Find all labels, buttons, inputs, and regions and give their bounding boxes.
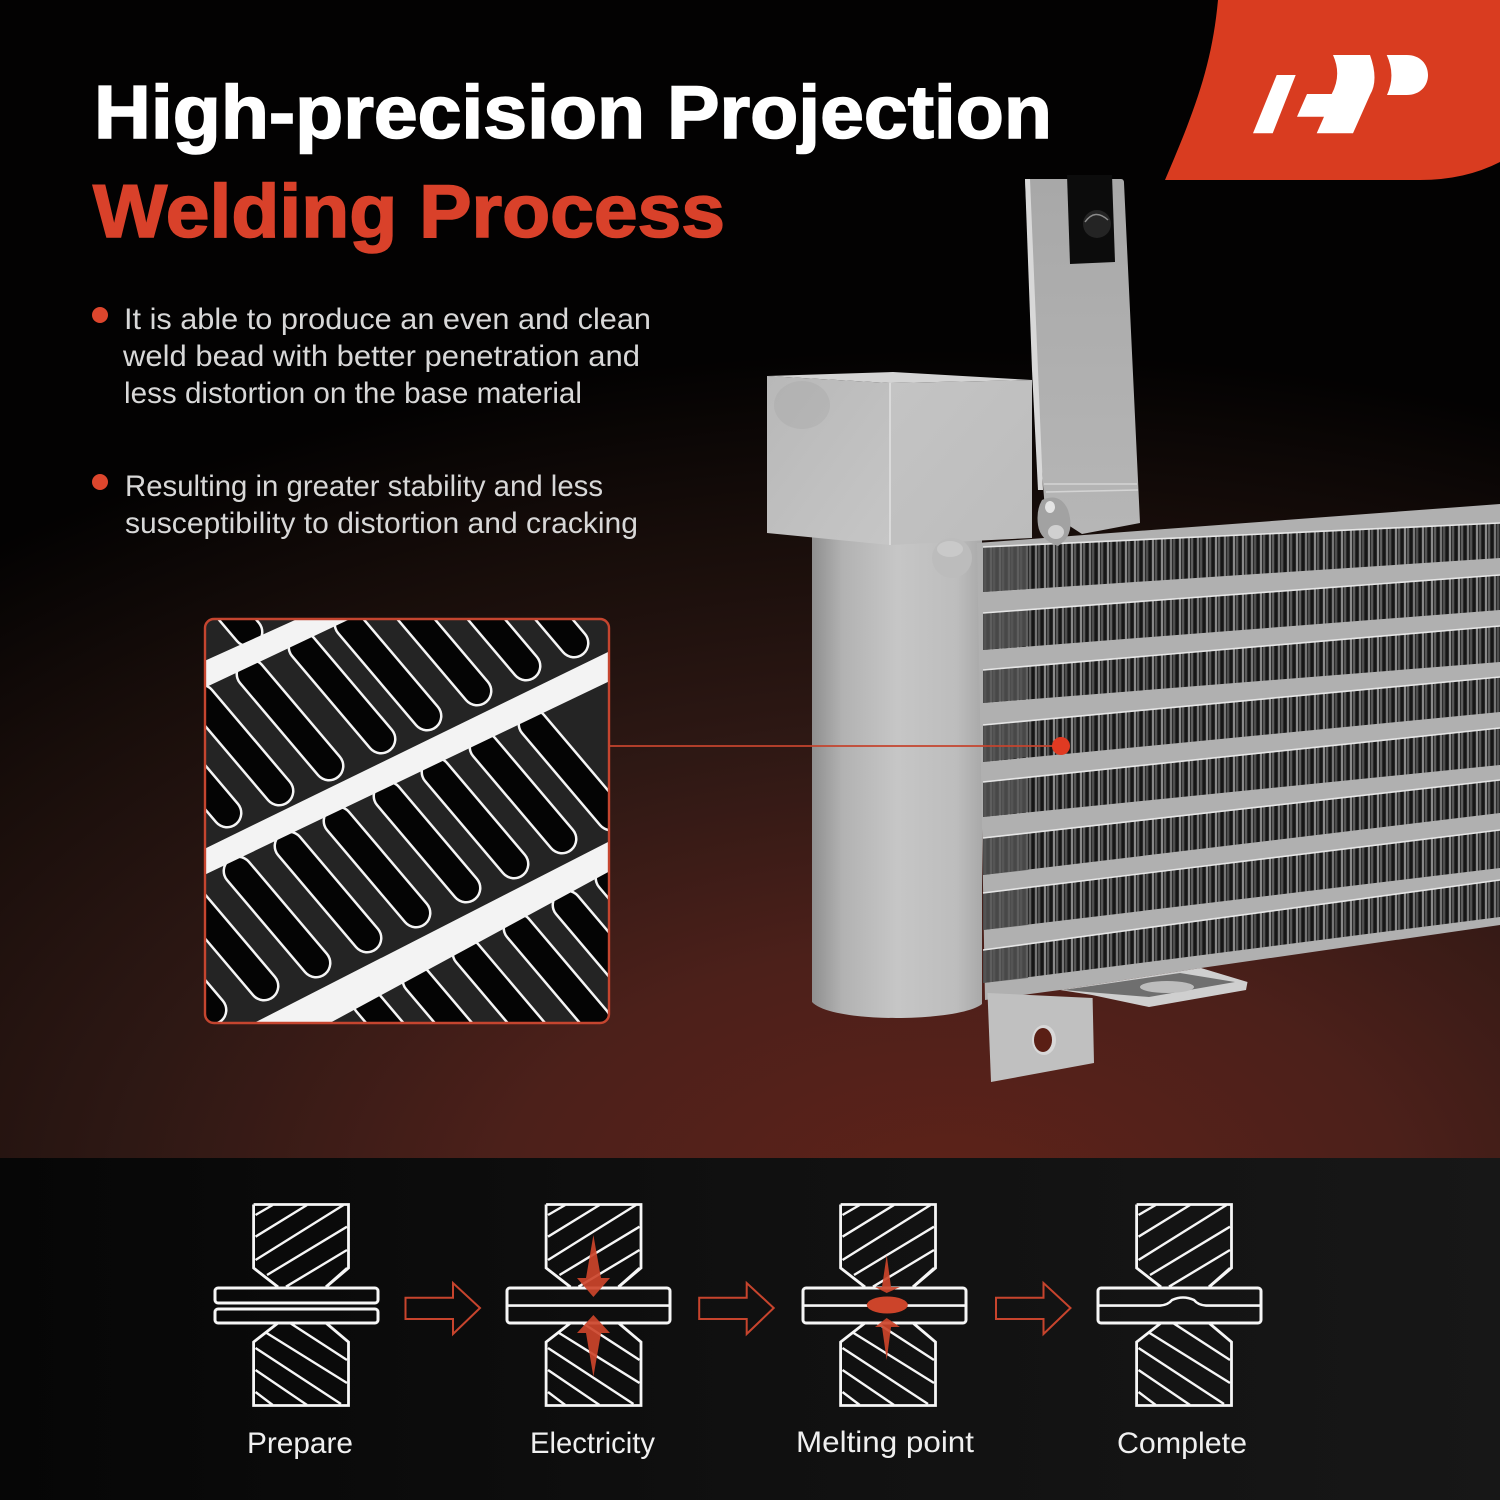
step 3: melting point: Melting point [796, 1426, 975, 1459]
background [0, 0, 1500, 1158]
condenser product [767, 175, 1500, 1082]
arrow 2 [699, 1283, 774, 1334]
title: Welding Process [93, 169, 725, 253]
square tank cap [767, 372, 1032, 545]
fin loops [206, 620, 608, 1022]
step 1: prepare [215, 1204, 378, 1460]
arrow 3 [996, 1283, 1070, 1334]
cylinder tank [812, 535, 982, 1018]
upper mounting bracket [1025, 175, 1140, 534]
step 3: melting point [796, 1204, 975, 1459]
title: High-precision Projection [94, 70, 1052, 154]
bullet: stability: Resulting in greater stability and less [125, 470, 603, 503]
bullet: weld bead [92, 303, 651, 410]
bullet: stability [92, 470, 638, 540]
title [93, 70, 1052, 253]
callout line [610, 737, 1070, 755]
step 2: electricity: Electricity [530, 1427, 655, 1460]
lower flange [1060, 968, 1248, 1007]
lower mounting bracket [988, 993, 1094, 1082]
white tube bars [200, 620, 612, 1024]
arrow 1 [406, 1283, 480, 1334]
fin core [977, 504, 1500, 1000]
weld joints [932, 498, 1070, 578]
bullet: stability: susceptibility to distortion and cracking [125, 507, 638, 540]
bullet: weld bead: It is able to produce an even and clean [124, 303, 651, 336]
step 4: complete [1098, 1204, 1261, 1460]
step 4: complete: Complete [1117, 1427, 1247, 1460]
process strip [0, 1158, 1500, 1500]
bullet: weld bead: less distortion on the base material [124, 377, 582, 410]
step 1: prepare: Prepare [247, 1427, 353, 1460]
brand logo corner [1165, 0, 1500, 180]
step 2: electricity [507, 1204, 670, 1460]
detail inset: fin close-up [204, 618, 610, 1024]
bullet: weld bead: weld bead with better penetration and [122, 340, 640, 373]
